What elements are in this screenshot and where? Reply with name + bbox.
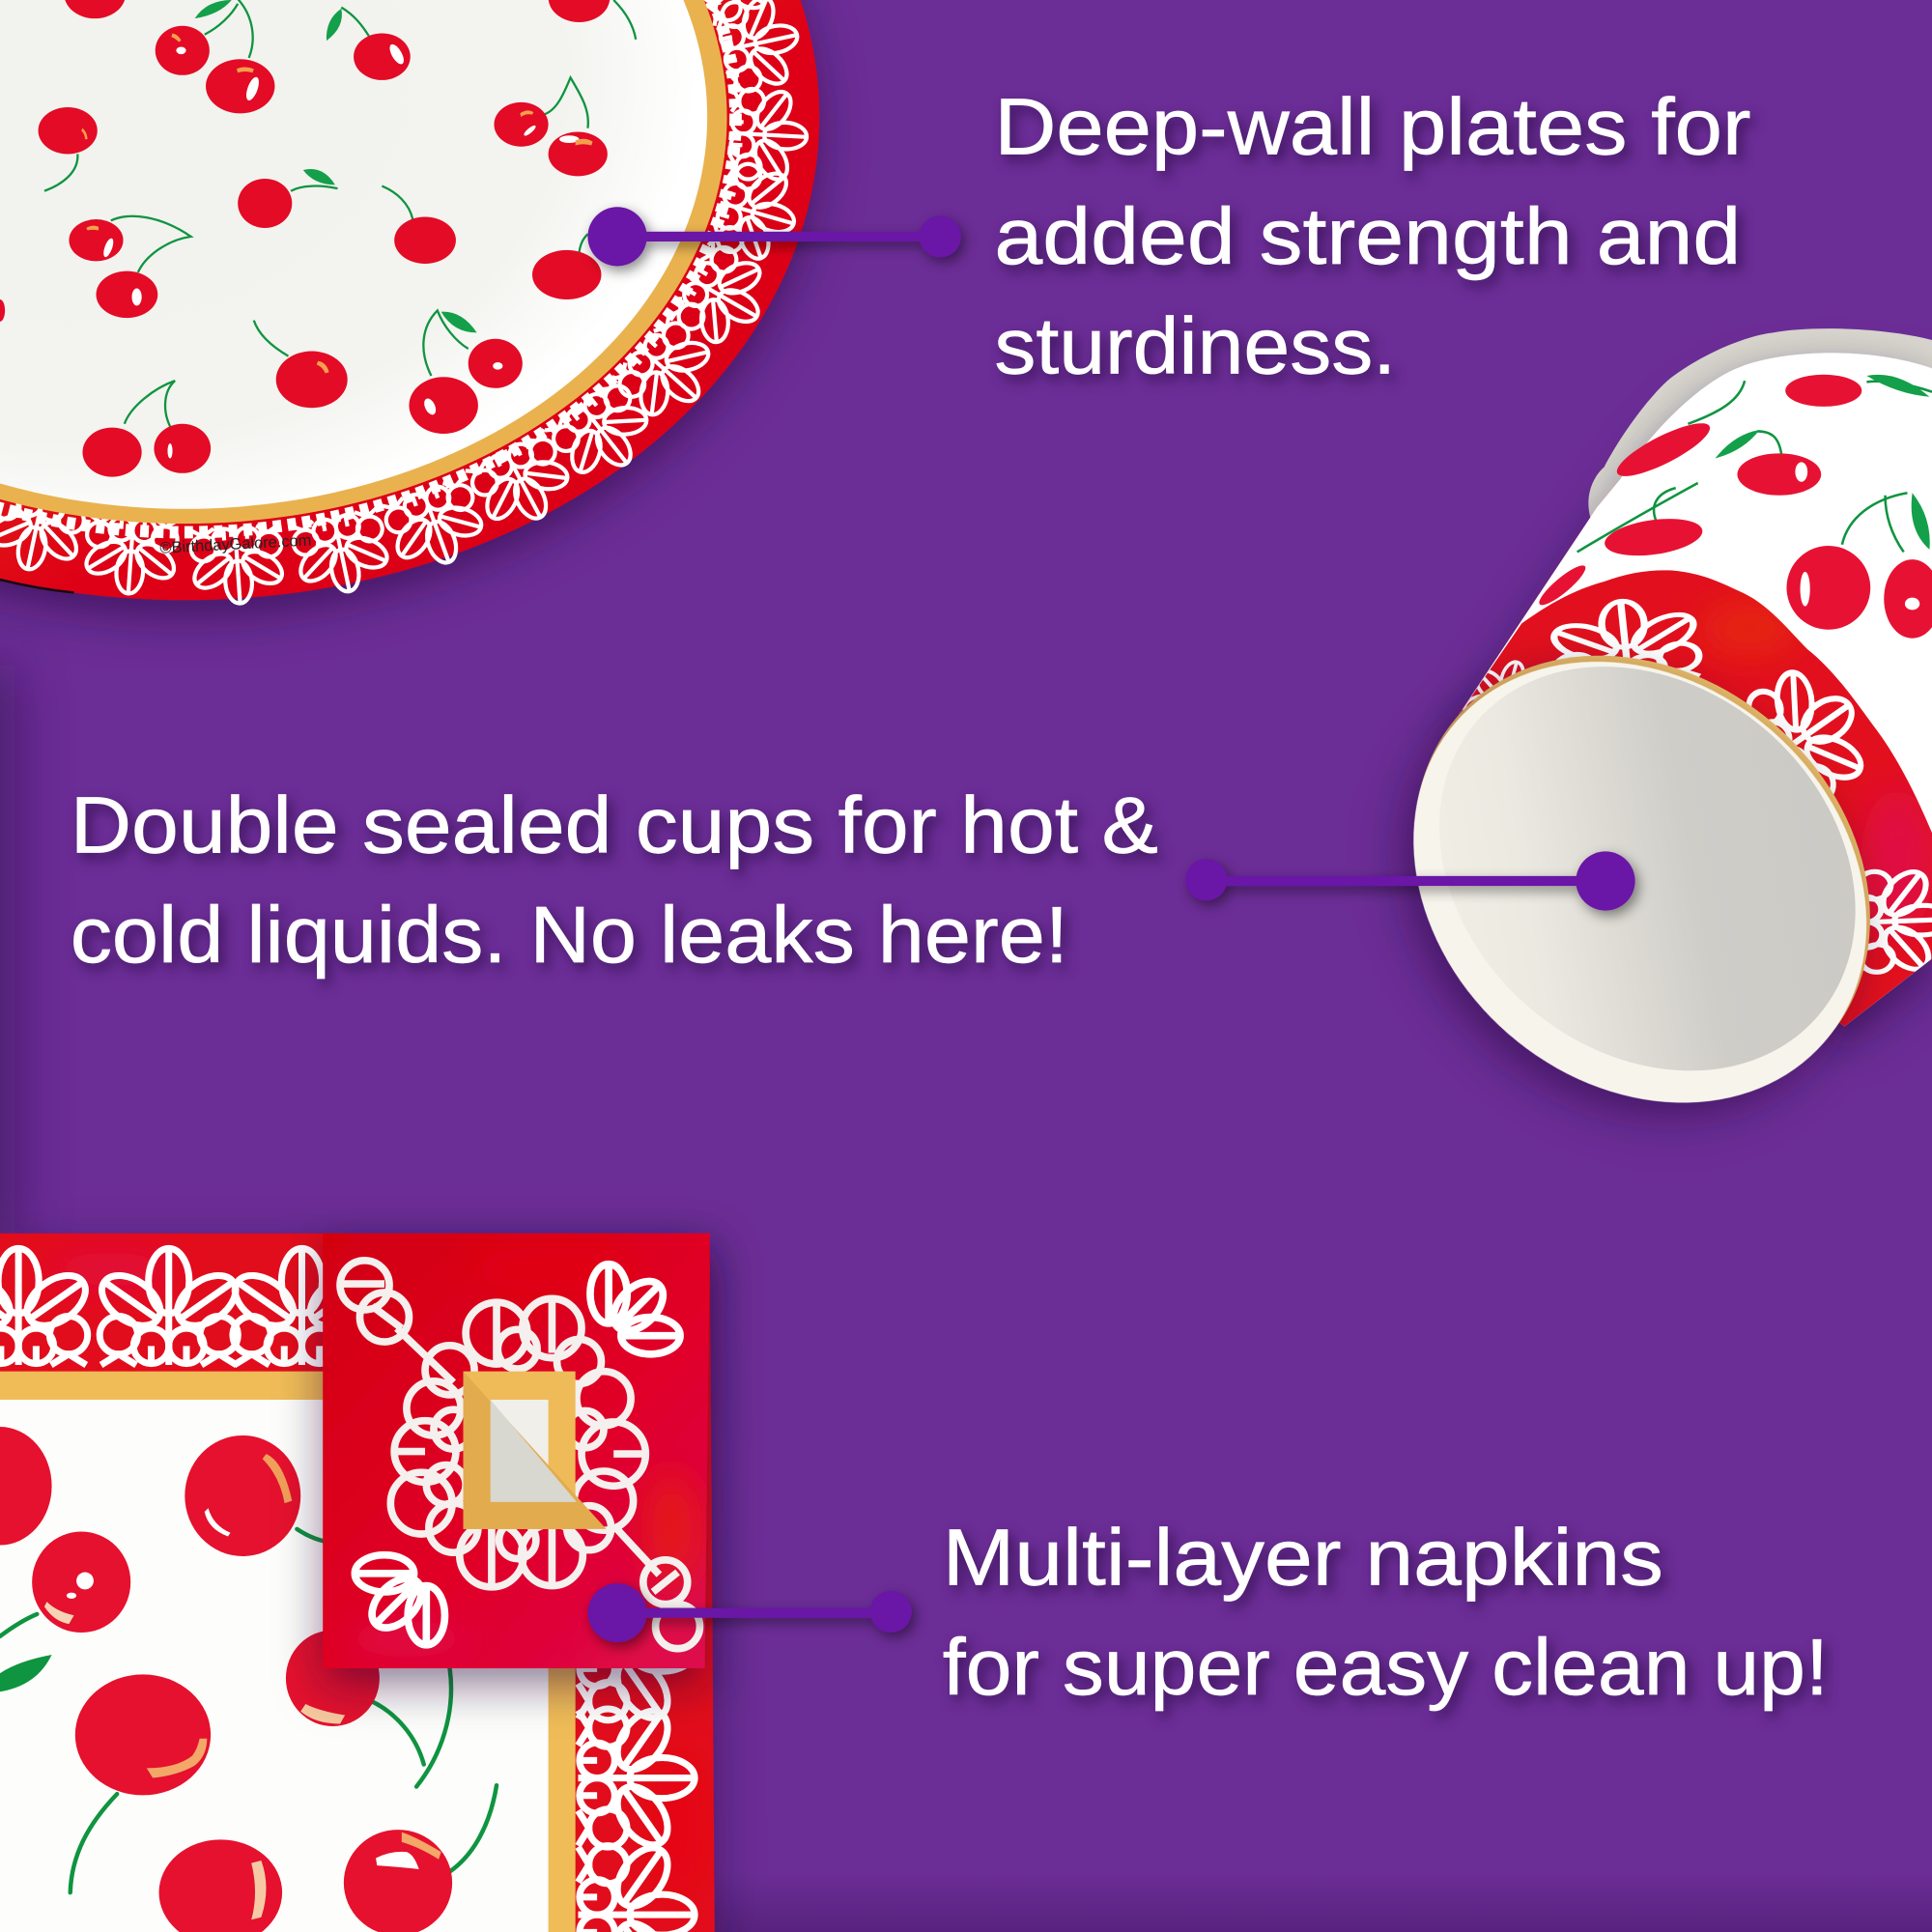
- flap: [323, 1234, 710, 1668]
- plate cherry highlights: [81, 33, 593, 458]
- napkin gold border: [0, 1372, 576, 1932]
- text: napkin feature: for super easy clean up!: [943, 1622, 1829, 1712]
- napkin cherries: [0, 1427, 452, 1932]
- plate stems: [44, 0, 636, 429]
- flap fold triangle: [464, 1372, 607, 1529]
- flap blotches: [345, 1247, 696, 1658]
- plate leaves: [195, 0, 477, 332]
- plate: [0, 0, 819, 607]
- napkin lace top border: [0, 1248, 378, 1365]
- text: plate feature: Deep-wall plates for: [994, 81, 1750, 171]
- flap white window: [491, 1400, 549, 1502]
- text: napkin feature: Multi-layer napkins: [943, 1512, 1663, 1602]
- cup cherries: [1535, 375, 1932, 643]
- cup leaves: [1716, 375, 1930, 550]
- plate gold ring: [0, 0, 727, 524]
- plate centre: [0, 0, 707, 509]
- napkin white centre: [0, 1400, 549, 1932]
- text: plate feature: sturdiness.: [994, 300, 1396, 390]
- text: cup feature: [71, 781, 1158, 980]
- text: cup feature: cold liquids. No leaks here!: [71, 890, 1068, 980]
- cup stems: [1577, 381, 1932, 552]
- text: cup feature: Double sealed cups for hot &: [71, 781, 1158, 870]
- cup body: [1452, 353, 1932, 1026]
- cup: [1378, 328, 1932, 1141]
- plate underside sliver: [0, 579, 74, 593]
- plate copyright text: ©BirthdayGalore.com: [159, 531, 312, 557]
- napkin sheet: [0, 1234, 715, 1932]
- callout: napkin: [587, 1583, 912, 1642]
- cup base rim: [1324, 571, 1932, 1194]
- napkin stems and leaf: [0, 1529, 497, 1892]
- callout: plate: [587, 207, 961, 267]
- text: plate feature: [994, 81, 1750, 390]
- plate lace border: [0, 0, 810, 607]
- cup rim: [1588, 328, 1932, 519]
- napkin border blotches: [49, 1252, 699, 1897]
- napkin cherry highlights: [44, 1454, 441, 1919]
- cup red band: [1452, 570, 1932, 1026]
- cup base: [1357, 583, 1932, 1154]
- napkin lace right border: [578, 1575, 695, 1932]
- flap lace: [340, 1261, 699, 1649]
- callout: cup: [1185, 851, 1635, 911]
- plate rim: [0, 0, 819, 600]
- cup gold edge: [1324, 564, 1932, 1191]
- flap gold square: [464, 1372, 576, 1529]
- cup lace: [1449, 593, 1932, 978]
- napkin folded corner: [323, 1234, 710, 1669]
- napkin: [0, 1234, 715, 1932]
- text: napkin feature: [943, 1512, 1829, 1712]
- cup band blotches: [1700, 601, 1932, 936]
- plate cherries: [0, 0, 610, 477]
- flap corner rosettes: [330, 1240, 704, 1669]
- text: plate feature: added strength and: [994, 191, 1741, 281]
